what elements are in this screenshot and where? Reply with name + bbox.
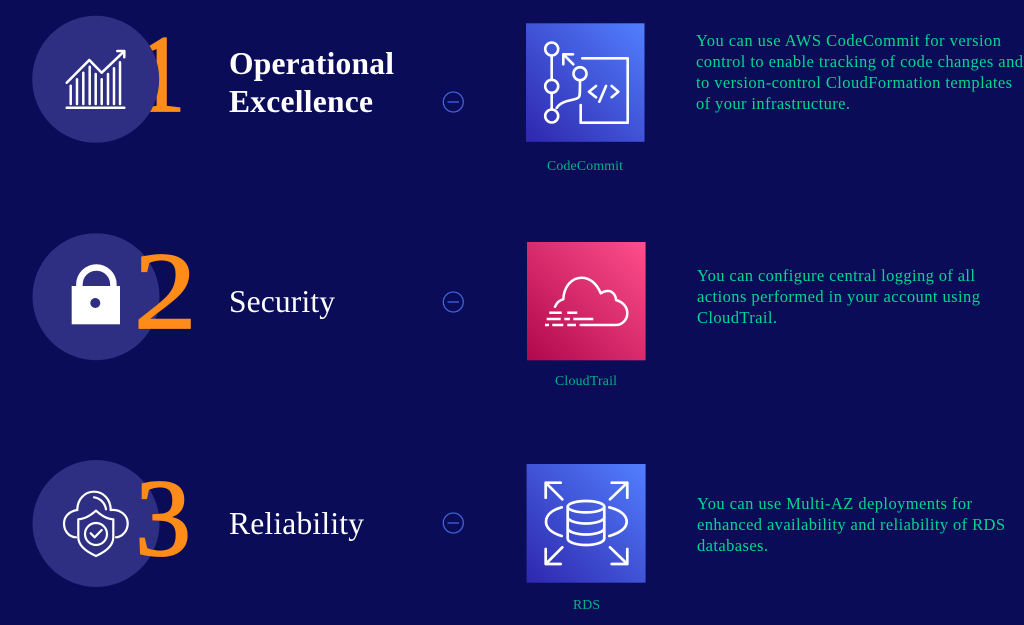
text: CodeCommit description: control to enable tracking of code changes and xyxy=(696,52,1024,71)
icon: collapse toggle xyxy=(443,92,463,112)
icon: CloudTrail xyxy=(527,242,646,360)
panel: reliability xyxy=(32,458,1005,612)
text: CodeCommit description: You can use AWS CodeCommit for version xyxy=(696,31,1001,50)
heading: operational excellence: Operational xyxy=(229,46,394,81)
icon badge: growth chart xyxy=(32,16,159,143)
label: CodeCommit: CodeCommit xyxy=(547,158,623,173)
text: CloudTrail description: CloudTrail. xyxy=(697,308,777,327)
text: CloudTrail description: You can configure central logging of all xyxy=(697,266,975,285)
label: CloudTrail: CloudTrail xyxy=(555,373,617,388)
number 3: 3 xyxy=(135,458,191,580)
text: CodeCommit description: to version-control CloudFormation templates xyxy=(696,73,1012,92)
icon: collapse toggle xyxy=(443,513,463,533)
panel: operational excellence xyxy=(32,13,1024,173)
label: RDS: RDS xyxy=(573,597,600,612)
icon badge: padlock xyxy=(32,233,160,360)
number 1: 1 xyxy=(135,13,186,135)
icon badge: cloud shield xyxy=(32,460,160,587)
text: RDS description: You can use Multi-AZ deployments for xyxy=(697,494,972,513)
text: CloudTrail description: actions performed in your account using xyxy=(697,287,980,306)
panel: security xyxy=(32,230,980,388)
heading: reliability: Reliability xyxy=(229,506,364,541)
text: RDS description: enhanced availability and reliability of RDS xyxy=(697,515,1005,534)
text: CodeCommit description: of your infrastructure. xyxy=(696,94,850,113)
text: RDS description: databases. xyxy=(697,536,768,555)
icon: RDS xyxy=(527,464,646,583)
heading: operational excellence: Excellence xyxy=(229,84,373,119)
number 2: 2 xyxy=(134,230,197,352)
icon: CodeCommit xyxy=(526,23,644,142)
heading: security: Security xyxy=(229,284,335,319)
icon: collapse toggle xyxy=(443,292,463,312)
